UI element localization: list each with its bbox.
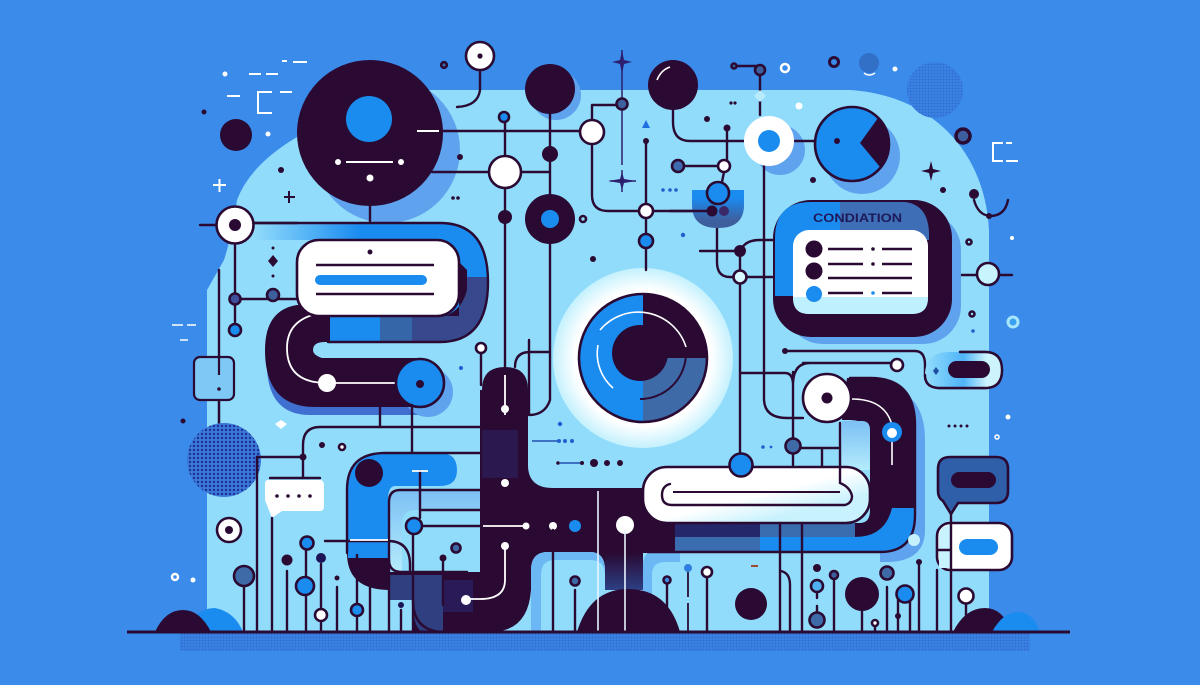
dotted sphere — [187, 423, 261, 497]
inner blue circle — [346, 96, 392, 142]
dark circles — [735, 559, 922, 620]
wire from ring — [480, 353, 482, 385]
list lines — [828, 249, 912, 293]
right blue hill — [992, 612, 1040, 632]
badge circle — [707, 182, 729, 204]
target — [217, 518, 241, 542]
target node — [216, 206, 254, 244]
card dot — [368, 250, 372, 254]
white dots — [335, 159, 404, 182]
node white center — [489, 156, 521, 188]
pill body — [643, 467, 870, 523]
centre pipe — [390, 367, 952, 632]
blue band — [254, 223, 488, 342]
node on line — [580, 120, 604, 144]
band navy — [675, 523, 760, 537]
white line on pipe — [468, 375, 526, 599]
lower panel — [541, 560, 605, 632]
white lines — [350, 471, 428, 540]
left wires — [200, 223, 297, 432]
white sparkle — [275, 420, 287, 429]
card body — [297, 240, 459, 316]
small ring right — [580, 216, 586, 222]
outline — [647, 378, 915, 552]
centre left blue block — [257, 427, 480, 632]
inner box — [390, 490, 480, 572]
card shadow — [785, 212, 961, 344]
ring white — [597, 312, 686, 388]
dark verticals — [553, 530, 575, 632]
speech bubble right — [937, 457, 1012, 632]
white arc — [852, 399, 892, 465]
highlight — [657, 67, 670, 80]
lower left navy — [390, 575, 443, 632]
halo — [553, 268, 733, 448]
pipe shadow — [267, 330, 425, 415]
title: CONDIATION — [813, 213, 902, 225]
center dot — [416, 380, 424, 388]
bottom right nodes — [664, 523, 1040, 632]
slate header — [840, 202, 929, 240]
outline — [257, 427, 480, 632]
node on navy line — [616, 98, 628, 110]
blue ring — [882, 422, 902, 442]
ring — [339, 444, 345, 450]
blue block — [348, 453, 457, 558]
white specks — [995, 414, 1010, 439]
white dots on pipe — [461, 405, 634, 605]
ground line — [127, 630, 1070, 634]
inner panel — [402, 510, 480, 572]
pipe body — [265, 305, 420, 407]
pie pointer dot — [834, 138, 840, 144]
navy dither — [482, 430, 518, 478]
pipe vertical lines — [598, 491, 625, 632]
list dots — [806, 240, 822, 302]
centre target — [553, 268, 733, 448]
node center — [758, 130, 780, 152]
small ring node — [452, 544, 460, 552]
right lower panel fill — [652, 562, 952, 632]
badge dots — [706, 206, 729, 216]
pipe shadow — [880, 385, 925, 562]
tag outline — [925, 352, 1002, 388]
pie shadow — [824, 118, 900, 194]
small nodes — [229, 289, 279, 336]
band dark stripe — [412, 262, 467, 316]
dark circle — [355, 459, 383, 487]
band dark navy 2 — [760, 523, 855, 537]
upper right wires — [608, 50, 1018, 465]
connector lines — [370, 70, 712, 415]
end node — [891, 359, 903, 371]
star — [921, 161, 941, 181]
fade block — [605, 553, 643, 590]
band shade — [412, 277, 488, 342]
hook dots — [969, 189, 992, 219]
tick — [751, 565, 758, 567]
wires — [667, 523, 966, 632]
bottom left hills — [155, 610, 211, 632]
stars — [608, 50, 636, 190]
white circle center — [822, 392, 832, 404]
white dots top left — [222, 72, 270, 136]
dark card — [773, 200, 952, 337]
white card — [793, 230, 928, 314]
bubble dots — [275, 494, 312, 498]
node — [786, 438, 800, 454]
ring node — [956, 129, 970, 143]
pie wedge — [860, 118, 889, 167]
pipe legs — [380, 405, 412, 452]
big dark circle — [297, 60, 443, 206]
band slate — [675, 537, 760, 552]
small nodes — [639, 64, 765, 284]
dashes — [172, 325, 196, 340]
rings — [664, 564, 974, 628]
top white node — [466, 42, 494, 70]
small ring — [570, 576, 580, 586]
bottom centre hill — [577, 589, 680, 632]
band outline — [254, 223, 488, 342]
blue bend — [760, 508, 915, 552]
blue dots — [761, 445, 772, 449]
left ring — [172, 574, 178, 580]
blue circle — [396, 359, 444, 407]
ground band — [180, 633, 1030, 651]
node small blue — [499, 112, 509, 122]
bottom left wires — [244, 457, 413, 632]
inner dark circle — [612, 325, 668, 381]
ring dark — [640, 353, 686, 399]
centre small blue dots — [459, 343, 623, 467]
wires — [646, 66, 1012, 465]
dark junction — [390, 367, 676, 632]
shadow of top dark circle — [531, 70, 581, 120]
wires — [937, 513, 951, 632]
white card — [297, 240, 459, 316]
blue tick — [871, 291, 875, 295]
top right rings — [781, 53, 898, 110]
hook — [974, 200, 1008, 216]
right pipe — [643, 348, 1010, 562]
outline — [579, 294, 707, 422]
shadow — [314, 77, 460, 223]
left dot — [180, 418, 186, 424]
small dot — [272, 274, 274, 278]
card blue bar — [315, 275, 427, 285]
dots — [782, 348, 968, 428]
white bracket — [993, 143, 1018, 161]
white card — [937, 523, 1012, 570]
right hill — [953, 608, 1012, 632]
white node — [318, 374, 336, 392]
lower dark shade — [443, 580, 473, 612]
top left cluster — [202, 42, 712, 415]
blue marker — [642, 120, 650, 128]
pipe body — [842, 378, 915, 508]
pale dot — [908, 534, 920, 546]
white big node — [744, 116, 794, 166]
white arc — [287, 312, 418, 383]
blue hill — [185, 608, 243, 632]
white circle — [803, 374, 851, 422]
blue thin wire — [687, 572, 689, 632]
plus signs — [213, 179, 226, 192]
dark lower — [850, 467, 915, 537]
dark plus — [284, 191, 295, 203]
node — [406, 518, 422, 534]
wires — [785, 351, 1002, 482]
pipe shadow of blue circle — [403, 367, 453, 417]
condition card — [773, 200, 999, 344]
S pipe — [265, 305, 453, 452]
diamond — [754, 90, 766, 102]
left nodes — [172, 206, 297, 497]
pill line — [673, 491, 840, 493]
pipe inner box — [842, 421, 870, 470]
dark dots — [202, 110, 596, 262]
square — [194, 357, 234, 400]
band navy — [380, 316, 412, 342]
connector node — [977, 263, 999, 285]
bubble top edge — [270, 477, 320, 479]
nodes — [234, 536, 404, 621]
ring — [476, 343, 486, 353]
pill tag — [925, 352, 1002, 388]
bubble pill — [951, 472, 996, 488]
small dot — [272, 246, 274, 250]
bottom left nodes — [155, 457, 413, 632]
top dark circle — [525, 64, 575, 114]
tag diamond — [933, 367, 939, 375]
card lines — [316, 265, 434, 294]
card band — [254, 223, 488, 342]
small ring — [441, 62, 447, 68]
dotted sphere — [907, 62, 963, 118]
white details — [346, 131, 439, 162]
lower panel rim — [531, 552, 605, 632]
tag body — [925, 352, 1002, 388]
small speech bubble — [265, 478, 324, 518]
card left tint — [939, 525, 951, 568]
light panel — [207, 90, 989, 632]
pie disk — [815, 107, 889, 181]
bubble — [938, 457, 1008, 514]
list ticks — [871, 247, 875, 266]
wire through square — [218, 357, 220, 432]
shadows — [755, 125, 805, 175]
slate quadrant — [643, 358, 707, 422]
smile — [864, 73, 875, 75]
blue disk — [579, 294, 707, 422]
left dot — [190, 578, 196, 582]
badge wire — [670, 210, 712, 212]
blue line — [532, 441, 582, 463]
pie chart — [815, 107, 889, 181]
tag pill — [948, 361, 990, 378]
small rings right — [966, 236, 1018, 333]
donut — [525, 194, 575, 244]
right lower panel rim — [643, 552, 680, 632]
junction dots — [643, 101, 946, 257]
white pill — [643, 467, 870, 523]
dark quadrant — [643, 294, 707, 358]
small dots — [300, 442, 446, 562]
badge — [692, 190, 744, 228]
blue node on pill — [730, 454, 752, 476]
lower band — [347, 553, 390, 590]
pill inner outline — [662, 483, 852, 505]
white marks — [227, 61, 307, 113]
blue dot — [569, 520, 581, 532]
diamond — [268, 255, 278, 267]
square dot — [217, 387, 221, 391]
band blue under card — [328, 316, 380, 342]
dark circle top — [648, 60, 698, 110]
dark dots row — [556, 459, 623, 467]
blue dots — [459, 366, 574, 443]
blue header — [775, 202, 840, 296]
thin navy lines — [610, 50, 636, 192]
bubble — [265, 480, 324, 518]
blue pill — [959, 539, 998, 555]
blue dots — [661, 188, 685, 237]
card lower tint — [793, 297, 928, 314]
